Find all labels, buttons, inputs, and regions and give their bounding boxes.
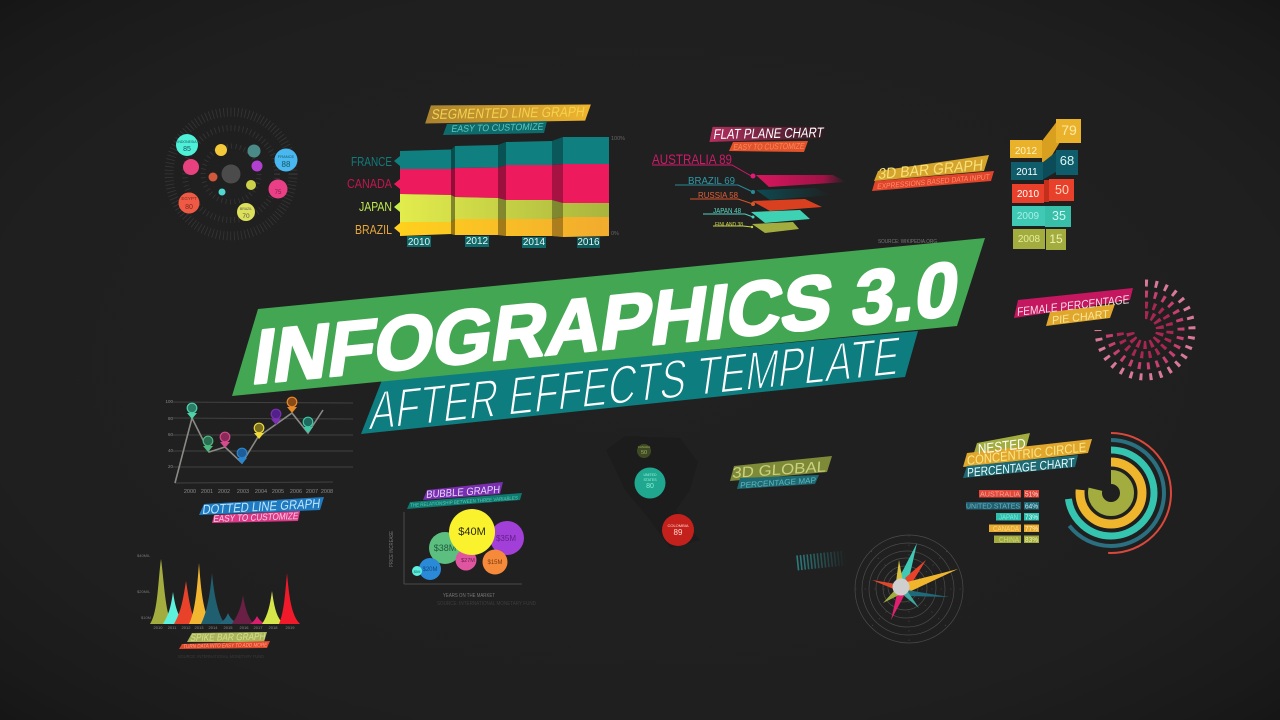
year labels <box>154 625 295 630</box>
bars: 15 <box>1049 232 1063 246</box>
teal subtitle banner <box>361 331 918 434</box>
heading: flat plane chart <box>709 121 826 152</box>
map markers: COLOMBIA <box>667 523 689 528</box>
legend rows: 77% <box>1025 524 1038 533</box>
spokes <box>855 535 964 643</box>
map markers <box>634 444 694 546</box>
legend rows <box>966 490 1039 544</box>
axis labels: PRICE INCREASE <box>389 531 395 567</box>
legend rows: 51% <box>1025 490 1038 498</box>
band labels: BRAZIL <box>355 223 392 237</box>
year labels: 2019 <box>286 625 295 630</box>
year labels: 2007 <box>306 489 318 495</box>
year labels: 2005 <box>272 489 284 495</box>
year labels: 2014 <box>523 237 546 248</box>
heading: dotted line graph <box>199 496 324 525</box>
map markers: CANADA <box>638 445 650 449</box>
panel: flat plane chart: BRAZIL 69 <box>688 176 735 187</box>
planes <box>756 175 846 187</box>
year labels: 2018 <box>269 625 278 630</box>
year labels: 2016 <box>577 237 600 248</box>
panel: spike bar graph <box>137 553 300 659</box>
axis labels: $40MIL <box>137 553 151 558</box>
band labels: JAPAN <box>359 200 392 214</box>
source note: SOURCE: WIKIPEDIA.ORG <box>878 239 937 245</box>
bubbles: EGYPT <box>181 196 197 201</box>
map silhouette <box>606 436 700 548</box>
star spikes <box>872 543 958 620</box>
axis labels <box>611 136 625 237</box>
bars: 2008 <box>1018 234 1041 245</box>
grid <box>173 402 353 483</box>
heading: 3D bar graph: 3D BAR GRAPH <box>878 157 984 183</box>
bubbles: $40M <box>458 526 486 538</box>
bars: 68 <box>1060 153 1074 168</box>
y axis labels: 40 <box>168 448 173 453</box>
bubbles: 85 <box>183 146 191 153</box>
heading: segmented line graph: EASY TO CUSTOMIZE <box>451 122 544 135</box>
heading: dotted line graph: DOTTED LINE GRAPH <box>202 496 321 517</box>
panel: radar star chart <box>855 535 964 643</box>
heading: spike bar graph: SPIKE BAR GRAPH <box>190 632 266 644</box>
green title banner <box>232 238 985 396</box>
heading: 3D bar graph <box>872 155 994 191</box>
year labels: 2003 <box>237 489 249 495</box>
year labels: 2008 <box>321 489 333 495</box>
bars: 79 <box>1061 122 1077 138</box>
bubbles: FRANCE <box>278 154 295 159</box>
bubbles <box>412 509 524 580</box>
concentric arcs <box>1051 433 1171 553</box>
heading: spike bar graph <box>179 632 270 650</box>
map markers: 50 <box>641 450 647 456</box>
legend rows: JAPAN <box>999 512 1018 522</box>
bubbles <box>176 134 298 221</box>
heading: bubble graph <box>407 482 522 509</box>
bubbles: $27M <box>461 558 475 564</box>
subtitle: AFTER EFFECTS TEMPLATE <box>366 324 904 442</box>
legend rows: 64% <box>1025 502 1038 510</box>
panel: bubble graph <box>389 482 536 607</box>
axis labels <box>137 553 151 620</box>
panel: radial bubble chart <box>169 112 298 236</box>
year labels <box>407 236 600 248</box>
bubbles: 70 <box>242 213 250 220</box>
axis labels: $20MIL <box>137 589 151 594</box>
band labels: FRANCE <box>351 155 392 169</box>
panel: nested concentric circle chart <box>963 433 1171 553</box>
radial tick rings <box>169 112 293 236</box>
legend rows: 83% <box>1025 535 1038 544</box>
heading: female percentage: PIE CHART <box>1052 308 1109 327</box>
heading: flat plane chart: FLAT PLANE CHART <box>713 124 825 142</box>
rings <box>855 535 963 643</box>
y axis labels: 100 <box>165 399 173 404</box>
year labels: 2002 <box>218 489 230 495</box>
heading: 3D global <box>730 456 832 490</box>
heading: 3D bar graph: EXPRESSIONS BASED DATA INPUT <box>877 172 991 191</box>
spikes <box>150 559 300 624</box>
bars: 2012 <box>1015 146 1038 157</box>
y axis labels: 60 <box>168 432 173 437</box>
year labels: 2012 <box>182 625 191 630</box>
map markers: 89 <box>674 528 683 537</box>
title: INFOGRAPHICS 3.0 <box>247 246 965 401</box>
panel: dotted line graph <box>165 397 353 525</box>
bubbles: $15M <box>487 560 503 566</box>
panel: main title banner <box>232 238 985 442</box>
axis labels: 0% <box>611 231 619 237</box>
panel: segmented line graph <box>347 103 625 248</box>
heading: segmented line graph <box>425 103 591 135</box>
bars: 50 <box>1055 183 1069 197</box>
heading: nested concentric circle: NESTED <box>978 435 1026 457</box>
decorative hatch bar <box>797 558 845 563</box>
bars: 2009 <box>1017 211 1040 222</box>
bars: 35 <box>1052 209 1066 223</box>
radial figures <box>1098 283 1192 377</box>
heading: bubble graph: BUBBLE GRAPH <box>426 484 500 501</box>
heading: nested concentric circle: CONCENTRIC CIRCLE <box>967 439 1087 468</box>
panel: flat plane chart <box>652 121 846 233</box>
map markers: UNITED <box>643 473 657 477</box>
bars: 2010 <box>1017 189 1040 200</box>
pins <box>187 397 313 464</box>
year labels: 2013 <box>195 625 204 630</box>
year labels: 2014 <box>209 625 218 630</box>
line <box>175 410 323 483</box>
legend rows: AUSTRALIA <box>980 490 1020 498</box>
bubbles: $35M <box>496 534 516 543</box>
year labels: 2011 <box>168 625 177 630</box>
heading: bubble graph: THE RELATIONSHIP BETWEEN THREE VARIABLES <box>410 495 519 509</box>
axis labels <box>389 531 536 607</box>
year labels: 2006 <box>290 489 302 495</box>
heading: nested concentric circle <box>963 433 1092 480</box>
bars <box>1010 119 1081 250</box>
y axis labels: 20 <box>168 464 173 469</box>
panel: flat plane chart: AUSTRALIA 89 <box>652 151 732 167</box>
map markers: 80 <box>646 483 654 490</box>
axes <box>404 512 522 584</box>
bubbles: INDONESIA <box>177 140 197 144</box>
axis labels: $10M <box>141 615 151 620</box>
panel: flat plane chart: JAPAN 48 <box>713 208 741 215</box>
bubbles: 80 <box>185 204 193 211</box>
year labels: 2001 <box>201 489 213 495</box>
heading: 3D global: 3D GLOBAL <box>732 458 827 482</box>
y axis labels <box>165 399 173 469</box>
axis labels: 100% <box>611 136 625 142</box>
heading: dotted line graph: EASY TO CUSTOMIZE <box>213 511 299 525</box>
heading: female percentage: FEMALE PERCENTAGE <box>1017 292 1130 319</box>
axis labels: SOURCE: INTERNATIONAL MONETARY FUND <box>437 601 536 607</box>
bubbles: 88 <box>282 160 291 169</box>
heading: spike bar graph: TURN DATA INTO EASY TO ADD MORE <box>183 643 268 650</box>
panel: 3D bar graph <box>872 119 1081 250</box>
heading: segmented line graph: SEGMENTED LINE GRAPH <box>431 103 586 122</box>
stacked bands <box>400 137 609 237</box>
source note: SOURCE: INTERNATIONAL MONETARY FUND <box>178 654 265 659</box>
panel: flat plane chart: RUSSIA 58 <box>698 190 738 200</box>
band labels: CANADA <box>347 177 393 191</box>
year labels: 2016 <box>240 625 249 630</box>
panel: flat plane chart: FINLAND 38 <box>715 222 743 228</box>
hub <box>892 578 910 596</box>
year labels: 2004 <box>255 489 267 495</box>
year labels: 2010 <box>408 237 431 248</box>
heading: female percentage <box>1014 288 1133 327</box>
map markers: STATES <box>643 478 657 482</box>
year labels: 2017 <box>254 625 263 630</box>
bars: 2011 <box>1016 167 1038 178</box>
year labels: 2015 <box>224 625 233 630</box>
panel: female percentage pie chart <box>1014 283 1192 377</box>
bubbles: $38M <box>434 543 456 553</box>
year labels: 2010 <box>154 625 163 630</box>
band labels <box>347 155 400 237</box>
bubbles: 75 <box>275 190 282 196</box>
y axis labels: 80 <box>168 416 173 421</box>
axis labels: YEARS ON THE MARKET <box>443 593 495 599</box>
legend rows: CANADA <box>993 524 1019 533</box>
heading: flat plane chart: EASY TO CUSTOMIZE <box>733 141 805 152</box>
year labels: 2000 <box>184 489 196 495</box>
legend rows: CHINA <box>999 535 1019 544</box>
bubbles: BRAZIL <box>240 207 252 211</box>
bubbles: $20M <box>422 567 438 573</box>
heading: nested concentric circle: PERCENTAGE CHART <box>967 456 1075 480</box>
bubbles: $5M <box>414 570 420 574</box>
panel: 3D global percentage map <box>606 436 832 548</box>
year labels: 2012 <box>466 236 489 247</box>
year labels <box>184 489 333 495</box>
labels and leader lines <box>652 165 756 228</box>
legend rows: UNITED STATES <box>966 502 1020 510</box>
heading: 3D global: PERCENTAGE MAP <box>740 476 816 490</box>
legend rows: 73% <box>1025 512 1038 522</box>
